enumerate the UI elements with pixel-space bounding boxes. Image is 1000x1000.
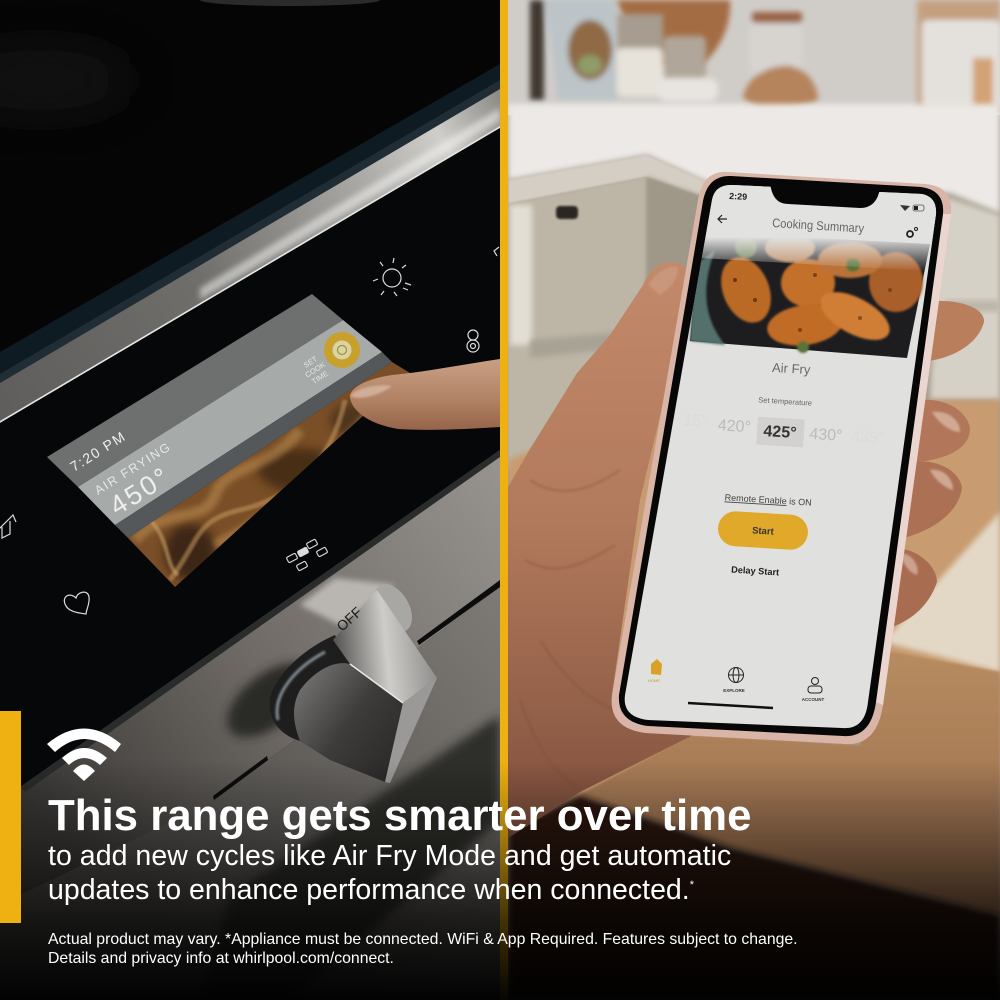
cloth [883, 512, 1000, 672]
lower panel [0, 587, 500, 1000]
text: delay start: Delay Start [731, 565, 779, 577]
gold centre divider [500, 0, 508, 1000]
collar back [366, 577, 420, 639]
board and mug right [917, 0, 1000, 124]
text: knob off label: OFF [333, 604, 365, 634]
front face [294, 663, 403, 782]
temperature selector: 430° [809, 426, 843, 445]
text: remote enable: Remote Enable is ON [724, 492, 812, 508]
tab bar icons: EXPLORE [723, 688, 745, 693]
text block: subheading [48, 840, 731, 906]
phone screen [625, 185, 936, 728]
text: cooking summary: Cooking Summary [772, 216, 865, 236]
text block: subheading: updates to enhance performance when connected.* [48, 874, 694, 906]
text block: disclaimer: Details and privacy info at whirlpool.com/connect. [48, 950, 394, 966]
bottom dark gradient [0, 760, 1000, 1000]
fingers behind phone [868, 301, 984, 630]
right face [385, 678, 437, 783]
panel: oven display [47, 294, 430, 600]
dark under table [508, 795, 1000, 1000]
text: set temperature: Set temperature [758, 395, 812, 408]
button: start: Start [752, 525, 775, 538]
icon: control panel symbols [0, 247, 499, 614]
text block: disclaimer: Actual product may vary. *Appliance must be connected. WiFi & App Required. Features subject to change. [48, 931, 798, 948]
icon: timer button [324, 332, 360, 368]
accent bar [0, 711, 21, 923]
counter edge [508, 155, 712, 204]
icon: status [900, 205, 924, 211]
panel: oven control left [0, 0, 500, 1000]
tab bar icons: ACCOUNT [802, 697, 824, 702]
hand palm [508, 262, 697, 838]
text block: subheading: to add new cycles like Air Fry Mode and get automatic [48, 840, 731, 872]
text: set cook time [299, 352, 332, 387]
cutting board [617, 0, 730, 72]
text: air fry: Air Fry [772, 360, 811, 377]
icon: settings [467, 330, 479, 352]
phone header [702, 185, 936, 270]
text block: disclaimer [48, 931, 798, 966]
jars [617, 12, 818, 110]
text: set cook time: COOK [303, 360, 327, 379]
icon: partial right edge [494, 247, 499, 256]
temperature selector: 425° [763, 423, 797, 442]
steel band [0, 450, 500, 905]
text: temperature: 450° [104, 461, 176, 521]
button: start [717, 510, 809, 551]
tab bar icons [648, 659, 824, 708]
icon: wifi [47, 728, 121, 781]
icon: back arrow [718, 215, 727, 223]
countertop [508, 104, 1000, 213]
plate highlight [300, 578, 395, 625]
icon: home tab [651, 659, 662, 675]
temperature selector: 435° [851, 428, 885, 447]
icon: favourite heart [64, 592, 89, 614]
top face [333, 590, 437, 703]
text: clock: 7:20 PM [67, 428, 129, 475]
phone body [612, 172, 951, 744]
icon: explore tab [728, 668, 744, 682]
panel: kitchen background right [500, 0, 1000, 1000]
knob [215, 577, 437, 783]
icon: account tab [808, 678, 822, 693]
temperature selector: 15° [683, 412, 708, 431]
temperature selector: 420° [717, 417, 751, 436]
table [508, 400, 1000, 800]
hand and phone [508, 172, 984, 838]
text: air frying: AIR FRYING [92, 439, 174, 498]
wall [500, 0, 1000, 115]
temperature selector [682, 412, 885, 452]
food image [690, 232, 930, 358]
slit [417, 580, 500, 645]
knob shadow [215, 649, 325, 751]
text: time: 2:29 [729, 191, 747, 202]
home indicator [688, 703, 773, 708]
heading: This range gets smarter over time [48, 791, 751, 840]
icon: home [0, 515, 16, 538]
icon: settings gears [907, 228, 918, 237]
finger pressing display [350, 359, 500, 430]
collar [270, 635, 350, 741]
icon: modes [286, 539, 328, 571]
wood [580, 650, 1000, 915]
text: set cook time: SET [302, 354, 319, 370]
icon: light [373, 258, 411, 296]
cabinets [508, 177, 647, 470]
handle [556, 206, 578, 219]
text: set cook time: TIME [310, 369, 330, 386]
phone notch [770, 182, 880, 208]
cookbook [530, 0, 617, 100]
flame image [128, 362, 410, 587]
tab bar icons: HOME [648, 678, 660, 683]
